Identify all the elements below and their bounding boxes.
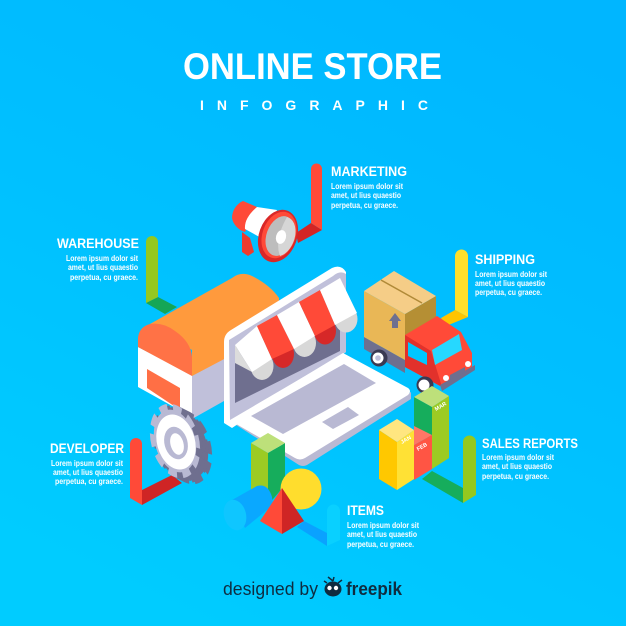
label: sales reports: amet, ut lius quaestio (482, 461, 552, 471)
label: sales reports: Lorem ipsum dolor sit (482, 452, 554, 462)
awning (235, 278, 358, 380)
label: marketing: perpetua, cu graece. (331, 200, 398, 210)
label: items: ITEMS (347, 503, 384, 518)
icon: freepik logo (324, 577, 342, 596)
items shapes (220, 433, 340, 546)
label: marketing: MARKETING (331, 164, 407, 179)
label: shipping: perpetua, cu graece. (475, 287, 542, 297)
label: marketing: amet, ut lius quaestio (331, 190, 401, 200)
warehouse side wall (192, 348, 240, 419)
label: shipping: Lorem ipsum dolor sit (475, 269, 547, 279)
label: shipping (475, 252, 547, 297)
footer: designed by freepik: freepik (346, 579, 403, 599)
connector: marketing (296, 164, 322, 243)
warehouse roof (150, 274, 279, 376)
item: blue cylinder (220, 485, 273, 533)
rear wheel (370, 350, 388, 366)
label: developer: DEVELOPER (50, 441, 124, 456)
warehouse building (138, 274, 279, 419)
laptop screen (235, 283, 340, 403)
cargo box (364, 271, 436, 360)
label: items: amet, ut lius quaestio (347, 529, 417, 539)
label: warehouse: perpetua, cu graece. (70, 272, 138, 282)
label: items (347, 503, 419, 549)
label: marketing (331, 164, 407, 210)
label: warehouse: amet, ut lius quaestio (68, 262, 138, 272)
subtitle: INFOGRAPHIC (200, 97, 428, 113)
label: developer: Lorem ipsum dolor sit (51, 458, 123, 468)
label: items: Lorem ipsum dolor sit (347, 520, 419, 530)
truck cab (405, 316, 475, 391)
label: sales reports: perpetua, cu graece. (482, 471, 549, 481)
connector: developer (130, 438, 182, 505)
item: red pyramid (260, 488, 304, 534)
delivery truck (364, 271, 475, 394)
laptop keyboard (251, 364, 376, 434)
label: marketing: Lorem ipsum dolor sit (331, 181, 403, 191)
truck chassis (364, 337, 405, 373)
bar: JAN: JAN (400, 435, 413, 446)
label: developer: amet, ut lius quaestio (53, 467, 123, 477)
icon: gear (146, 403, 216, 485)
item: green box (251, 433, 285, 505)
laptop touchpad (322, 407, 359, 429)
sales bar chart (379, 386, 449, 490)
label: developer (50, 441, 124, 486)
laptop (224, 267, 411, 466)
label: sales reports (482, 436, 578, 481)
footer: designed by freepik (223, 577, 403, 599)
laptop screen frame (224, 267, 346, 428)
bar: MAR: MAR (434, 401, 448, 413)
warehouse roof front (138, 324, 192, 376)
bar: FEB: FEB (416, 442, 429, 453)
warehouse door (147, 369, 180, 410)
laptop screen bezel (229, 272, 346, 420)
item: yellow sphere (280, 468, 322, 510)
front wheel (416, 376, 434, 394)
warehouse front wall (138, 347, 192, 417)
connector: items (297, 504, 340, 546)
label: warehouse: Lorem ipsum dolor sit (66, 253, 138, 263)
label: sales reports: SALES REPORTS (482, 436, 578, 451)
gear extrusion (149, 404, 216, 485)
gear face (146, 403, 204, 479)
title: ONLINE STORE (183, 46, 442, 87)
connector: sales reports (422, 436, 476, 503)
connector: shipping (441, 250, 468, 326)
label: shipping: SHIPPING (475, 252, 535, 267)
icon: megaphone (232, 201, 305, 268)
connector: warehouse (146, 236, 177, 314)
label: items: perpetua, cu graece. (347, 539, 414, 549)
laptop base (231, 353, 410, 460)
label: shipping: amet, ut lius quaestio (475, 278, 545, 288)
footer: designed by freepik: designed by (223, 579, 318, 599)
laptop base edge (230, 392, 411, 466)
label: developer: perpetua, cu graece. (55, 476, 123, 486)
label: warehouse (57, 236, 139, 282)
label: warehouse: WAREHOUSE (57, 236, 139, 251)
